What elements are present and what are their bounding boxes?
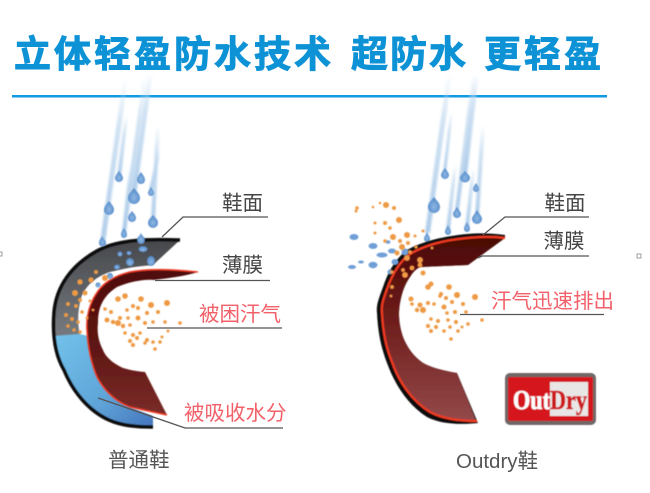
callout: shoe surface right: 鞋面 [544, 192, 586, 215]
logo: OutDry: Out [513, 385, 550, 415]
membrane left [87, 270, 198, 415]
title: 立体轻盈防水技术 [14, 34, 334, 75]
shoe upper left [53, 240, 180, 428]
title: 更轻盈 [484, 34, 604, 75]
callout: trapped sweat: 被困汗气 [199, 303, 281, 326]
sweat dots in upper [64, 270, 108, 334]
callout: water absorbed: 被吸收水分 [184, 402, 286, 425]
water drops right [424, 168, 482, 242]
panel: Outdry shoe [348, 74, 614, 473]
released sweat dots [408, 282, 484, 341]
title: 超防水 [351, 34, 468, 75]
logo: OutDry [505, 373, 596, 425]
callout: shoe surface right [483, 192, 589, 235]
title [14, 34, 604, 75]
trapped sweat dots [103, 293, 182, 351]
shoe upper right [377, 233, 505, 424]
escaping sweat dots [354, 202, 434, 298]
right edge handle [637, 254, 641, 258]
callout: shoe surface left: 鞋面 [222, 192, 263, 215]
rain streaks left [100, 72, 161, 243]
caption: ordinary shoe: 普通鞋 [108, 449, 170, 472]
caption: Outdry shoe: Outdry鞋 [456, 450, 538, 473]
callout: membrane left [155, 254, 270, 280]
callout: membrane left: 薄膜 [222, 254, 263, 277]
logo: OutDry: Dry [550, 385, 587, 415]
splash droplets [348, 234, 408, 274]
callout: shoe surface left [162, 192, 268, 237]
callout: water absorbed [98, 398, 286, 428]
callout: membrane right: 薄膜 [544, 230, 584, 253]
panel: ordinary shoe [53, 72, 286, 472]
left edge handle [0, 252, 2, 256]
water drops left [96, 171, 158, 288]
rain streaks right [425, 74, 485, 233]
callout: membrane right [478, 230, 589, 258]
callout: trapped sweat [147, 303, 282, 328]
title underline [12, 95, 607, 98]
callout: sweat released: 汗气迅速排出 [491, 290, 614, 313]
